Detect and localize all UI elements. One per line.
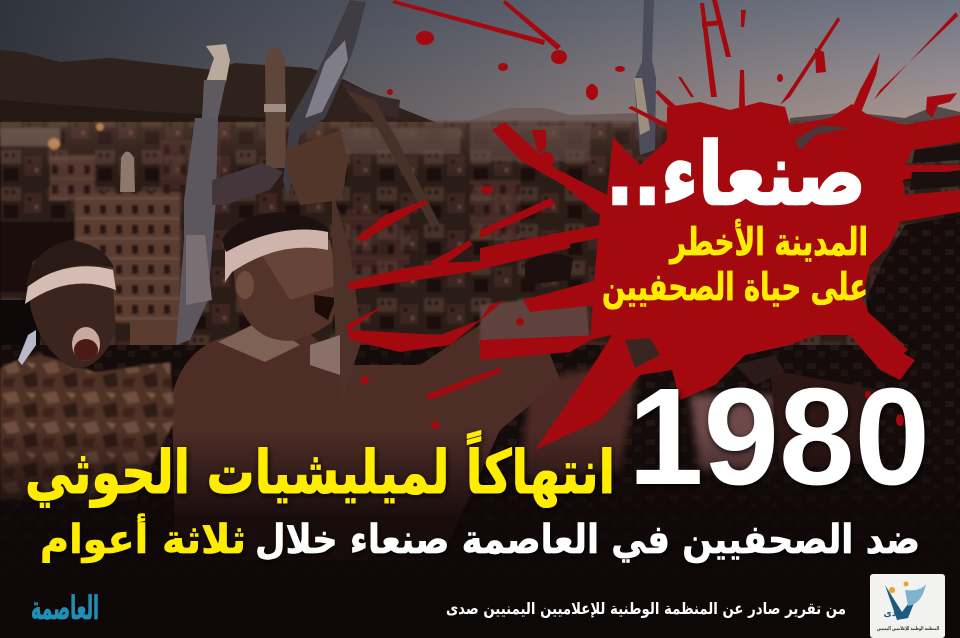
background: sky bbox=[0, 0, 960, 130]
sub headline: three years in yellow: ثلاثة أعوام bbox=[40, 513, 246, 563]
logo: Mada organization: مدى bbox=[883, 609, 903, 619]
subtitle line 1: المدينة الأخطر bbox=[669, 218, 868, 264]
rifle: right bbox=[283, 0, 440, 225]
blood splatter: gaps showing the photo bbox=[525, 125, 960, 385]
logo: Al-Asima channel: العاصمة bbox=[31, 589, 99, 627]
source note: من تقرير صادر عن المنظمة الوطنية للإعلاميين اليمنيين صدى bbox=[446, 599, 846, 618]
headline: violations by militias: انتهاكاً لميليشيات الحوثي bbox=[25, 430, 615, 508]
soldier: right figure bbox=[172, 130, 590, 560]
background: mountains bbox=[0, 50, 960, 135]
blood splatter bbox=[346, 0, 960, 450]
logo: Mada organization bbox=[870, 574, 945, 638]
lower darkening over photo bbox=[0, 430, 960, 638]
title: Sanaa: صنعاء..‏ bbox=[606, 125, 866, 225]
background: old city bbox=[0, 47, 960, 422]
rifle: left bbox=[176, 44, 283, 345]
big number 1980: 1980 bbox=[628, 360, 930, 514]
background: dark lower buildings bbox=[0, 345, 960, 638]
rifle: distant raised bbox=[634, 0, 656, 155]
soldier: left figure bbox=[0, 240, 175, 500]
